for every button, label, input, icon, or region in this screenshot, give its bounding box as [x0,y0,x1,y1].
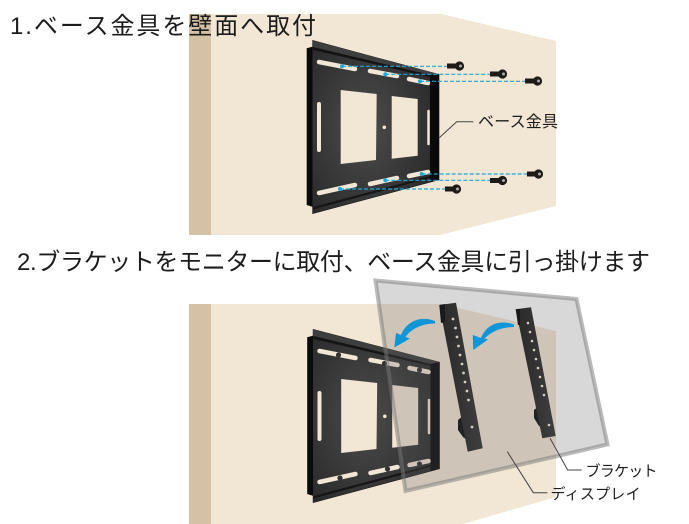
base bracket: step 1 [307,40,439,214]
wall: step 1 [189,14,556,235]
callout: base bracket label: ベース金具 [478,113,558,131]
callout: bracket label: ブラケット [586,462,658,480]
callout: bracket label [550,438,658,480]
arrow: right blue arrow [473,322,514,350]
display: translucent panel [376,280,608,491]
bracket: left rail [439,303,483,452]
wall: step 2 [189,304,556,524]
dashed guide lines [338,64,527,191]
callout: base bracket label [439,113,558,138]
bracket: right rail [516,307,556,438]
title: step 1: 1.ベース金具を壁面へ取付 [10,13,316,40]
callout: display label [507,452,640,503]
base bracket: step 2 [307,329,440,503]
callout: display label: ディスプレイ [550,485,640,503]
icon: six screws [445,61,543,194]
arrow: left blue arrow [394,319,435,348]
title: step 2: 2.ブラケットをモニターに取付、ベース金具に引っ掛けます [17,249,650,276]
